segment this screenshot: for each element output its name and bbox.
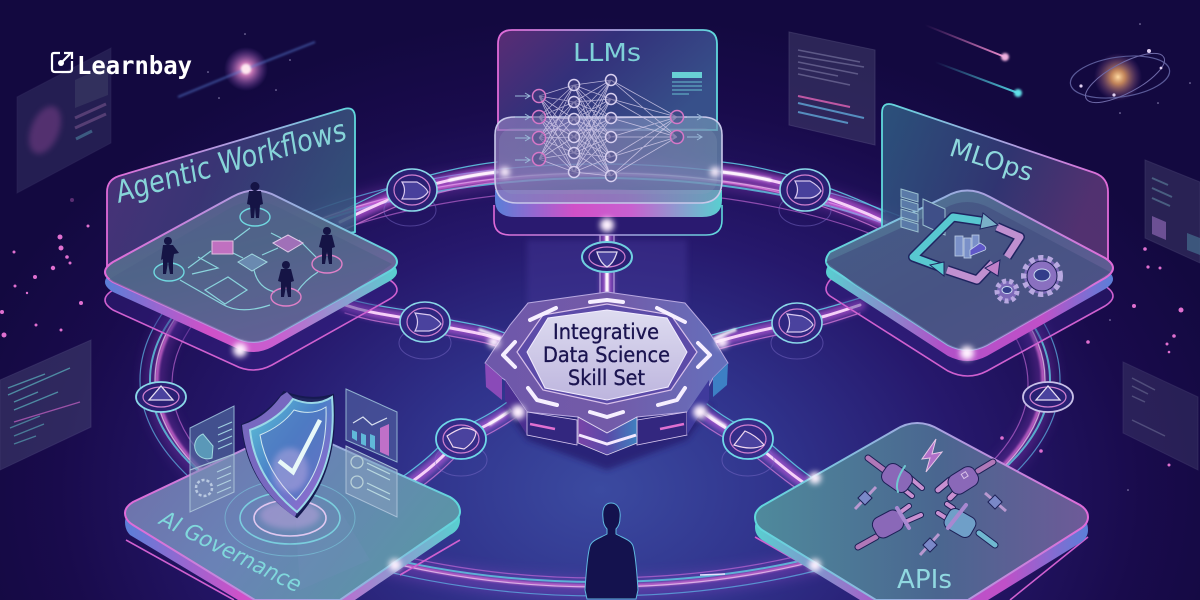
documents icon [955, 235, 986, 258]
white stars [207, 23, 1191, 491]
heading: AI Governance [153, 507, 308, 597]
platform top [125, 430, 460, 600]
light column behind LLM connector [527, 240, 687, 305]
loop pink segments [947, 227, 1020, 280]
heading: Agentic Workflows [114, 113, 349, 211]
connector node: right ring [1023, 382, 1073, 412]
lightning bolt [922, 439, 942, 472]
connector node: APIs to hub [722, 419, 774, 476]
ghost outline [105, 218, 397, 370]
hub title line 2: Data Science [543, 343, 670, 367]
platform inner [826, 202, 1110, 361]
loop cyan segments [913, 217, 987, 267]
check mark [279, 420, 320, 472]
silhouette [585, 503, 638, 599]
ring track [140, 164, 1060, 596]
logo text: Learnbay [77, 51, 192, 80]
legend lines [672, 72, 702, 94]
platform top [826, 190, 1113, 350]
hub top [485, 292, 728, 433]
lower light [295, 510, 370, 590]
connector node: LLM to hub [582, 242, 632, 272]
back wall [107, 108, 355, 272]
workflow node: diamond 2 [273, 235, 303, 252]
connector node: left ring [136, 382, 186, 412]
panel: Agentic Workflows [105, 108, 397, 370]
panel: MLOps [826, 104, 1113, 376]
plug: bottom right [938, 504, 995, 545]
star burst [178, 42, 315, 97]
comet: cyan [935, 62, 1022, 97]
heading: APIs [897, 565, 952, 595]
platform top [755, 423, 1088, 600]
platform side [495, 190, 722, 217]
connector node: agentic to hub [399, 302, 451, 359]
junction glows [233, 167, 974, 571]
background screen: bottom right [1123, 362, 1198, 470]
hub inner face [527, 310, 687, 400]
heading: MLOps [946, 133, 1037, 187]
hub side: left [505, 380, 527, 435]
platform inner [109, 244, 392, 342]
hub title line 1: Integrative [553, 320, 659, 344]
background screen: right [1145, 160, 1200, 263]
small plug bodies [858, 491, 1002, 552]
neural network nodes [532, 74, 684, 182]
data stacks [901, 189, 945, 235]
back wall [498, 30, 717, 130]
platform inner [499, 128, 717, 194]
ghost outline [755, 537, 1088, 600]
hub title line 3: Skill Set [568, 366, 645, 390]
connector node: top left [384, 169, 437, 226]
particles right [1000, 247, 1184, 466]
hub side: lower right [637, 412, 687, 445]
logo [52, 51, 192, 80]
back wall [882, 104, 1108, 270]
platform side [755, 433, 1088, 600]
workflow lines [180, 228, 318, 310]
plug: top right [938, 462, 993, 498]
neural network links [539, 80, 677, 176]
loop arrowheads [930, 213, 1000, 276]
hub inner frame [517, 304, 697, 404]
hub side: centre [578, 417, 637, 455]
hub side: far right [713, 363, 728, 397]
gears [997, 258, 1060, 301]
left dashboard panels [190, 406, 234, 512]
heading: LLMs [573, 38, 641, 67]
hub side: lower left [527, 412, 577, 445]
chevrons [503, 300, 710, 417]
hub spokes [340, 162, 885, 496]
shield [242, 392, 334, 517]
platform side [105, 200, 397, 352]
panel: AI Governance [125, 389, 460, 600]
logo icon [52, 53, 72, 72]
workflow node: square [212, 241, 233, 254]
hub highlights [530, 424, 684, 429]
platform top [495, 117, 722, 203]
platform top [105, 190, 397, 342]
right dashboard panels [346, 389, 397, 517]
background screen: top centre [789, 32, 875, 145]
comet: pink [925, 25, 1009, 61]
hub side: right [687, 380, 709, 435]
bottom light streak [700, 574, 725, 575]
connector node: governance to hub [435, 419, 487, 476]
input and output arrows [515, 93, 702, 163]
ghost outline [826, 218, 1113, 376]
plug: top left [868, 458, 922, 496]
ghost outline [494, 205, 722, 235]
background screen: top left [17, 48, 111, 193]
background screen: bottom left [0, 340, 91, 470]
loop arrows [913, 217, 1020, 280]
galaxy [1068, 44, 1172, 112]
particles left [0, 198, 90, 338]
small plugs [855, 487, 1006, 555]
central hub [233, 167, 974, 571]
agent rings [154, 208, 342, 306]
ghost outline [126, 540, 460, 600]
agents [161, 182, 335, 297]
workflow node: diamond 1 [238, 254, 267, 271]
connector node: top right [779, 169, 831, 226]
panel: LLMs [494, 30, 722, 235]
panel: APIs [755, 423, 1088, 600]
connector node: MLOps to hub [771, 303, 823, 359]
platform side [826, 202, 1113, 361]
hub side: far left [485, 363, 502, 400]
platform side [125, 440, 460, 600]
plug: bottom left [858, 506, 921, 547]
concentric rings [225, 480, 355, 556]
hub shadow [502, 405, 713, 470]
hub title [543, 320, 670, 390]
